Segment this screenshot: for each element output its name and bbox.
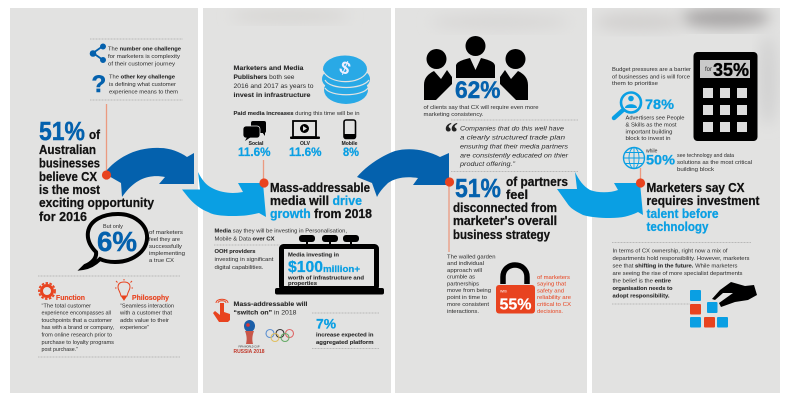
stat: mobile: Mobile: [342, 141, 358, 147]
stat: OLV: [289, 121, 322, 159]
icon: calculator 35%: 35%: [713, 60, 749, 80]
definition: function: from online research prior to: [42, 332, 112, 338]
icon: calculator 35%: [694, 52, 758, 141]
callout: but only 6%: 6%: [97, 226, 137, 257]
icon: padlock 55%: With: [500, 290, 507, 294]
icon: padlock 55%: 55%: [500, 296, 532, 314]
text: switch on: [234, 301, 308, 316]
headline: mass-addressable media: media will drive: [270, 194, 362, 208]
definition: function: has with a brand or company,: [42, 325, 114, 331]
definition: function: “The total customer: [42, 304, 91, 310]
quote: are consistently educated on thier: [460, 152, 569, 160]
text: infrastructure intro: 2016 and 2017 as years to: [234, 83, 314, 90]
headline: 51% of partners: of partners: [506, 175, 568, 189]
icon: tapping hand: [213, 299, 230, 322]
headline: mass-addressable media: [270, 181, 372, 221]
text: OOH providers: digital capabilities.: [214, 265, 264, 271]
logo: world cup 2018: [234, 320, 265, 355]
icon: padlock 55%: [496, 265, 535, 314]
icon: mobile phone: [344, 120, 356, 138]
panel: talent and ownership: [592, 8, 780, 393]
definition: function: touchpoints that a customer: [42, 318, 112, 324]
text: walled garden: interactions.: [447, 309, 480, 315]
callout: but only 6%: successfully: [149, 244, 182, 250]
stat: 7%: increase expected in: [316, 332, 374, 338]
icon: laptop: [290, 121, 320, 139]
panel: partners: [395, 8, 587, 393]
text: walled garden: more consistent: [447, 302, 490, 308]
panel background: [592, 8, 780, 393]
text: budget pressures: Budget pressures are a barrier: [612, 67, 691, 73]
stat: 62%: [424, 77, 538, 118]
text: infrastructure intro: Publishers both see: [234, 74, 295, 81]
quote: a clearly structured trade plan: [460, 134, 566, 142]
stat: 78%: 78%: [645, 96, 675, 112]
text: media say: [214, 228, 348, 242]
stat: 62%: 62%: [455, 77, 500, 104]
stat: 78%: & Skills as the most: [626, 122, 677, 128]
headline: mass-addressable media: growth from 2018: [270, 207, 372, 221]
text: infrastructure intro: invest in infrastructure: [234, 92, 311, 99]
headline: 51% of Australian businesses: for 2016: [39, 210, 87, 224]
text: walled garden: The walled garden: [447, 254, 496, 260]
icon: stack of coins: $: [337, 57, 353, 79]
challenge list: [90, 44, 181, 98]
headline: 51% of partners: [453, 173, 568, 242]
text: safety and reliability: critical to CX: [537, 302, 571, 308]
text: safety and reliability: decisions.: [537, 309, 563, 315]
text: OOH providers: [214, 249, 274, 271]
headline: 51% of partners: business strategy: [453, 228, 550, 242]
icon: magnifier with person: [614, 92, 641, 118]
icon: question mark: ?: [92, 71, 106, 98]
arrow: light blue, panel two: [182, 172, 266, 217]
text: infrastructure intro: Marketers and Media: [234, 65, 304, 72]
definition: function: post purchase.”: [42, 347, 78, 353]
headline: marketers say CX: requires investment: [646, 194, 760, 208]
text: other key challenge: The other key challenge: [109, 74, 175, 80]
arrow: dark blue, panel one: [107, 148, 194, 197]
text: safety and reliability: [537, 275, 571, 315]
text: safety and reliability: of marketers: [537, 275, 570, 281]
stat: social: [238, 121, 271, 159]
connector dot: panel two: [259, 178, 269, 188]
stat: 50%: building block: [677, 167, 714, 173]
panel background: [10, 8, 198, 393]
quote: product offering.”: [459, 161, 516, 168]
headline: 51% of Australian businesses: believe CX: [39, 170, 98, 184]
text: CX ownership: departments hold responsibility. However, marketers: [612, 256, 750, 262]
text: walled garden: move from being: [447, 288, 491, 294]
headline: 51% of partners: feel: [506, 188, 528, 202]
headline: marketers say CX: [646, 181, 760, 234]
text: OOH providers: OOH providers: [214, 249, 256, 255]
text: budget pressures: of businesses and is will force: [612, 74, 690, 80]
text: OOH providers: investing in significant: [214, 257, 274, 263]
headline: 51% of partners: 51%: [455, 173, 501, 203]
icon: speech bubbles: [243, 121, 266, 141]
callout: but only 6%: a true CX: [149, 258, 174, 264]
headline: 51% of Australian businesses: Australian: [39, 143, 96, 157]
stat: 62%: of clients say that CX will require even more: [424, 105, 538, 111]
stat: OLV: OLV: [300, 141, 311, 147]
stat: 50%: [646, 148, 752, 173]
text: safety and reliability: saying that: [537, 282, 567, 288]
text: media say: Media say they will be investing in Personalisation,: [214, 228, 348, 234]
icon: gear: [39, 283, 55, 299]
text: CX ownership: are seeing the rise of more specialist departments: [612, 271, 743, 277]
text: number one challenge: [108, 46, 181, 68]
billboard: $100 million+: $100: [288, 259, 323, 276]
billboard: $100 million+: [275, 235, 384, 294]
logo: world cup 2018: RUSSIA 2018: [234, 349, 265, 355]
definition: philosophy: [115, 279, 174, 331]
definition: philosophy: Philosophy: [132, 295, 169, 302]
icon: three people: [424, 36, 528, 100]
definition: philosophy: experience”: [120, 325, 149, 331]
text: infrastructure intro: [234, 65, 314, 99]
text: other key challenge: [109, 74, 178, 96]
headline: 51% of Australian businesses: of: [89, 128, 101, 142]
billboard: $100 million+: Media investing in: [288, 252, 340, 258]
text: CX ownership: [612, 248, 750, 300]
text: switch on: Mass-addressable will: [234, 301, 308, 308]
text: walled garden: approach will: [447, 268, 482, 274]
headline: marketers say CX: technology: [646, 220, 709, 234]
quote: [443, 117, 569, 168]
text: CX ownership: the belief is the entire: [612, 278, 671, 284]
text: safety and reliability: reliability are: [537, 295, 571, 301]
arrow: light blue, panel four: [557, 172, 643, 218]
headline: marketers say CX: talent before: [646, 207, 719, 221]
icon: globe: [624, 148, 644, 168]
stat: 50%: while: [646, 148, 658, 154]
text: other key challenge: is defining what customer: [109, 82, 176, 88]
headline: marketers say CX: Marketers say CX: [646, 181, 745, 195]
text: CX ownership: In terms of CX ownership, right now a mix of: [612, 248, 728, 254]
headline: 51% of Australian businesses: 51%: [39, 116, 85, 146]
stat: mobile: 8%: [343, 145, 359, 159]
stat: 7%: [316, 316, 374, 346]
stat: 50%: 50%: [646, 152, 676, 168]
text: walled garden: and individual: [447, 261, 484, 267]
headline: 51% of Australian businesses: is the most: [39, 183, 101, 197]
callout: but only 6%: implementing: [149, 251, 185, 257]
icon: share: [90, 44, 106, 62]
icon: stack of coins: [322, 56, 370, 104]
billboard: $100 million+: worth of infrastructure and: [287, 276, 364, 282]
icon: speech bubble: [83, 214, 147, 268]
panel background: [203, 8, 391, 393]
stat: social: Social: [249, 141, 264, 147]
icon: billboard frame: [275, 235, 384, 294]
callout: but only 6%: feel they are: [149, 237, 180, 243]
text: other key challenge: experience means to them: [109, 90, 178, 96]
text: walled garden: point in time to: [447, 295, 487, 301]
logo: olympic rings: [266, 330, 294, 342]
text: walled garden: crumble as: [447, 274, 475, 280]
headline: mass-addressable media: Mass-addressable: [270, 181, 370, 195]
icon: hand placing blocks: [690, 282, 757, 328]
text: walled garden: partnerships: [447, 282, 479, 288]
definition: philosophy: adds value to their: [120, 318, 169, 324]
quote: “: [443, 117, 458, 149]
definition: philosophy: “Seamless interaction: [120, 304, 174, 310]
callout: but only 6%: of marketers: [149, 230, 183, 236]
stat: 62%: marketing consistency.: [424, 112, 484, 118]
headline: 51% of partners: disconnected from: [453, 201, 557, 215]
text: safety and reliability: safety and: [537, 288, 564, 294]
headline: 51% of Australian businesses: exciting opportunity: [39, 196, 154, 210]
definition: function: [39, 283, 114, 353]
text: budget pressures: [612, 67, 691, 87]
icon: calculator 35%: for: [705, 67, 712, 73]
definition: philosophy: with a customer that: [119, 310, 172, 316]
connector dot: panel three: [445, 177, 454, 187]
text: number one challenge: The number one challenge: [108, 46, 181, 52]
stat: 78%: [626, 96, 684, 142]
connector dot: panel four: [636, 178, 645, 188]
headline: 51% of Australian businesses: businesses: [39, 156, 100, 170]
stat: social: 11.6%: [238, 145, 271, 159]
text: paid media increases: Paid media increases during this time will be in: [234, 111, 360, 117]
billboard: $100 million+: million+: [323, 264, 360, 274]
stat: 7%: aggregated platform: [316, 340, 374, 346]
stat: 78%: block to invest in: [626, 136, 670, 142]
text: number one challenge: for marketers is complexity: [108, 54, 180, 60]
headline: 51% of partners: marketer's overall: [453, 214, 557, 228]
text: CX ownership: organisation needs to: [612, 286, 673, 292]
billboard: $100 million+: properties: [288, 281, 317, 287]
stat: 78%: Advertisers see People: [626, 116, 684, 122]
icon: light bulb: [115, 279, 133, 300]
stat: OLV: 11.6%: [289, 145, 322, 159]
stat: mobile: [342, 120, 359, 159]
callout: but only 6%: But only: [103, 224, 123, 230]
panel: media investment: [203, 8, 391, 393]
callout: but only 6%: [83, 214, 185, 268]
headline: 51% of Australian businesses: [39, 116, 154, 224]
stat: 50%: see technology and data: [677, 153, 735, 159]
panel background: [395, 8, 587, 393]
quote: ensuring that their media partners: [460, 144, 569, 150]
text: CX ownership: adopt responsibility.: [612, 294, 670, 300]
panel: the challenge: [10, 8, 198, 393]
arrow: dark blue, panel three: [357, 149, 449, 197]
connector dot: panel one: [102, 170, 111, 180]
text: budget pressures: them to prioritise: [612, 81, 658, 87]
definition: function: experience encompasses all: [42, 310, 111, 316]
stat: 7%: 7%: [316, 316, 337, 332]
stat: 78%: important building: [626, 130, 672, 136]
text: walled garden: [447, 254, 496, 315]
text: media say: Mobile & Data over CX: [214, 236, 275, 242]
quote: Companies that do this well have: [460, 126, 565, 132]
text: CX ownership: see that shifting in the future. While marketers: [612, 264, 738, 270]
logo: world cup 2018: FIFA WORLD CUP: [238, 346, 260, 348]
definition: function: purchase to loyalty programs: [42, 340, 114, 346]
stat: 50%: solutions as the most critical: [677, 160, 752, 166]
text: switch on: “switch on” in 2018: [234, 310, 297, 316]
text: number one challenge: of their customer journey: [108, 62, 175, 68]
definition: function: Function: [56, 295, 85, 302]
